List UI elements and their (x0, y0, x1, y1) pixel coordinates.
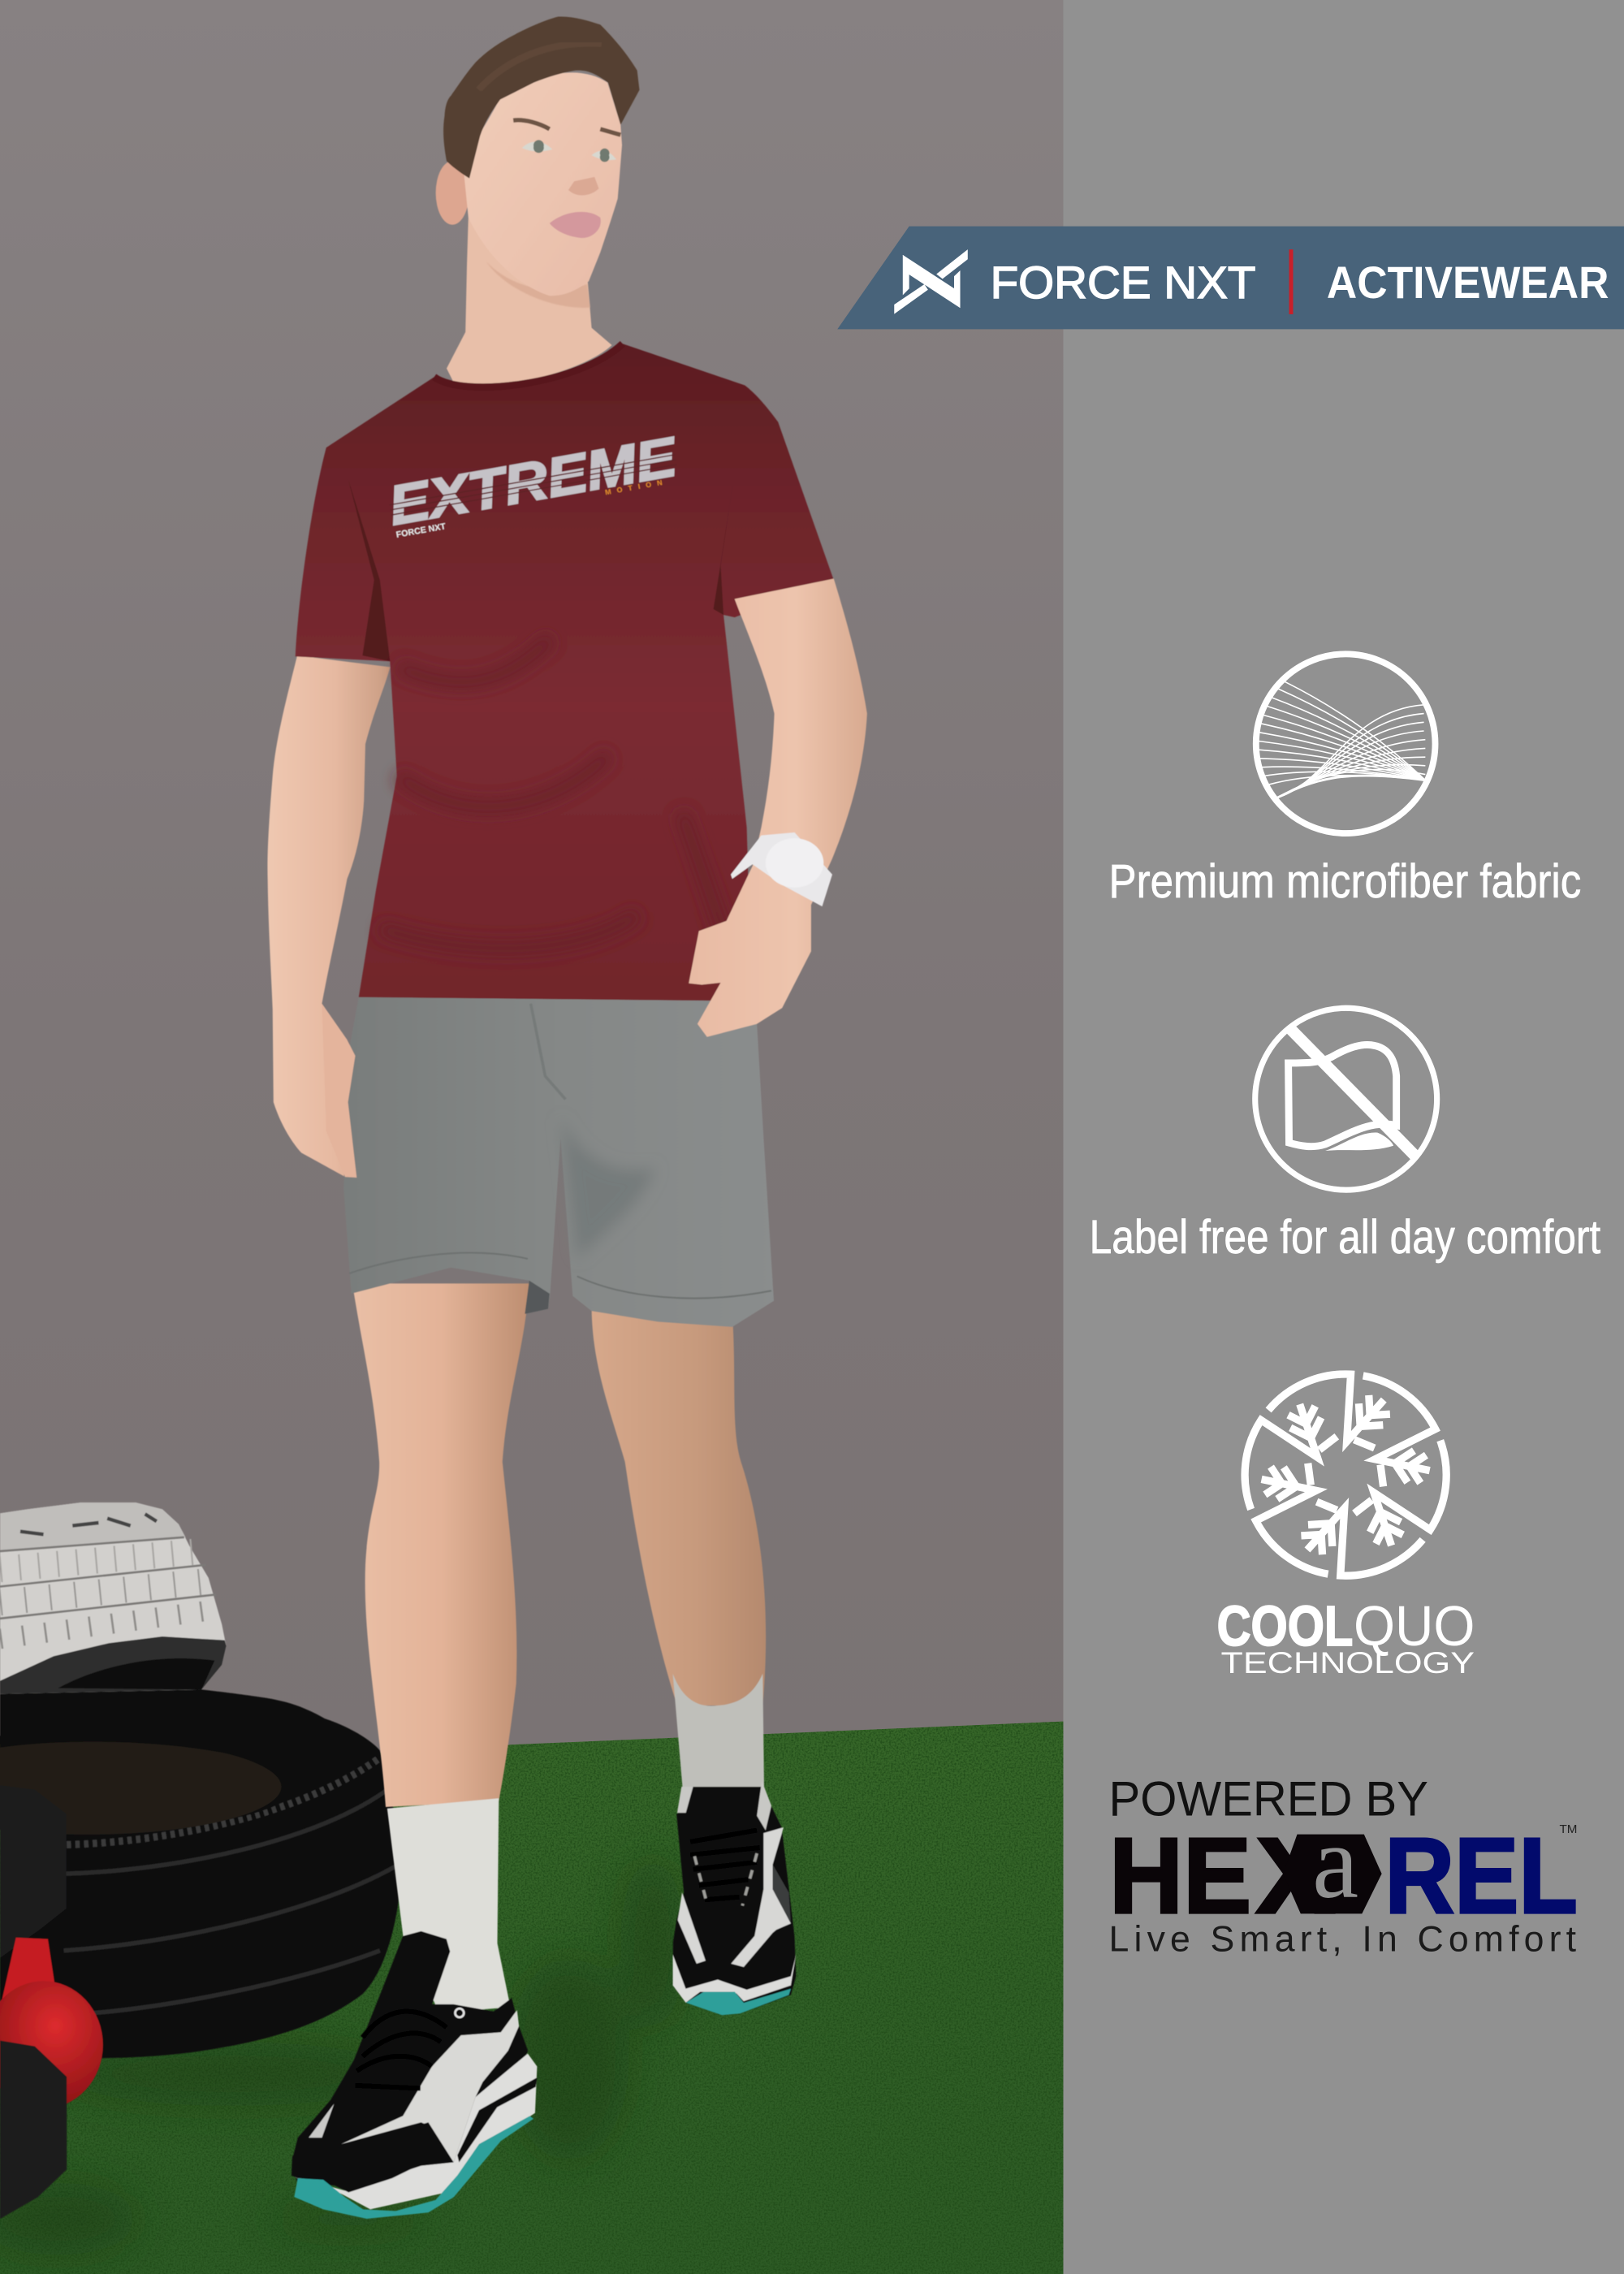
front sock (387, 1798, 511, 2013)
wordmark: COOL: COOL (1217, 1594, 1353, 1658)
front shoe laces (356, 2012, 447, 2088)
irises (533, 140, 610, 162)
front shoe white panel (341, 2010, 519, 2162)
ear (436, 161, 469, 225)
wordmark: QUO: QUO (1354, 1594, 1475, 1658)
REL letters: REL (1384, 1816, 1578, 1936)
front shoe eyelet (456, 2008, 464, 2017)
front shoe side stripe (309, 2103, 334, 2138)
back shoe sole (673, 1955, 796, 2003)
turf floor (0, 1722, 1063, 2274)
print: FORCE NXT: FORCE NXT (395, 521, 447, 540)
back sock (673, 1674, 764, 1792)
icon: woven fibre lines in circle (1256, 654, 1436, 833)
shorts fly (531, 1004, 565, 1100)
icon: snowflake ring (1215, 1347, 1476, 1602)
neck shadow (486, 261, 590, 308)
category name: ACTIVEWEAR (1327, 257, 1609, 308)
brows (513, 120, 620, 135)
red kettlebell (0, 1938, 103, 2108)
icon: Force NXT monogram (894, 249, 968, 314)
nose shadow (568, 177, 599, 196)
white painted tyre (0, 1502, 227, 1694)
hair (443, 16, 640, 179)
back shoe side panels (678, 1827, 791, 1967)
front shoe midsole (292, 2054, 537, 2209)
viewer-right arm and hand (689, 578, 867, 1037)
photo: model (267, 16, 867, 2219)
upper dumbbell (0, 1785, 67, 1958)
brand name: FORCE NXT (991, 257, 1255, 308)
photo: gym props (0, 1502, 400, 2219)
feature: Coolquo technology (1215, 1347, 1476, 1680)
back shoe (673, 1781, 796, 2015)
shorts hem (349, 1253, 771, 1299)
lower dumbbell (0, 2040, 67, 2219)
face (464, 72, 622, 296)
back shoe laces (690, 1831, 760, 1900)
front shoe teal outsole (294, 2116, 533, 2219)
turf shadows (0, 1857, 685, 2255)
black tyres (0, 1684, 400, 2058)
print: EXTREME: EXTREME (385, 426, 682, 537)
viewer-left arm (267, 655, 390, 1177)
wristwatch (731, 832, 832, 906)
neck and head (436, 16, 640, 387)
red divider (1289, 249, 1293, 314)
wordmark: TECHNOLOGY: TECHNOLOGY (1221, 1645, 1475, 1680)
t-shirt (296, 344, 834, 1001)
shirt fold shadows (380, 638, 732, 958)
hair highlight (478, 43, 602, 90)
banner ribbon (837, 227, 1624, 329)
eyes (522, 141, 616, 160)
Hexarel endorsement logo (1109, 1772, 1578, 1959)
front shoe toe cap (292, 2122, 429, 2192)
back shoe collar (677, 1781, 771, 1831)
POWERED BY: POWERED BY (1109, 1772, 1428, 1827)
icon: crossed-out label (1255, 1008, 1437, 1190)
HE letters: HE (1109, 1816, 1251, 1936)
brand banner (837, 227, 1624, 329)
watch face (766, 838, 823, 888)
shorts shadows (560, 1117, 655, 1259)
panel: feature sidebar (1063, 0, 1624, 2274)
shorts (343, 997, 774, 1327)
neck (447, 218, 612, 387)
black hexagon (1283, 1835, 1382, 1913)
trademark: TM (1560, 1822, 1577, 1836)
lips (550, 212, 601, 238)
sleeve shadow (348, 478, 734, 661)
collar band (434, 344, 623, 387)
feature: label free (1090, 1008, 1600, 1264)
front leg (292, 1283, 537, 2219)
panel: photo background wall (0, 0, 1063, 2274)
print: stripe (390, 455, 676, 515)
feature: microfiber fabric (1109, 654, 1581, 908)
viewer-left hand thumb (322, 1004, 356, 1178)
back leg (592, 1305, 796, 2015)
X letter joined to hexagon: X (1255, 1816, 1334, 1936)
chest print (385, 426, 683, 540)
print: MOTION: MOTION (604, 478, 668, 496)
lowercase a in hexagon: a (1312, 1804, 1358, 1920)
front shoe (292, 1931, 537, 2219)
tagline: Live Smart, In Comfort (1109, 1920, 1577, 1959)
